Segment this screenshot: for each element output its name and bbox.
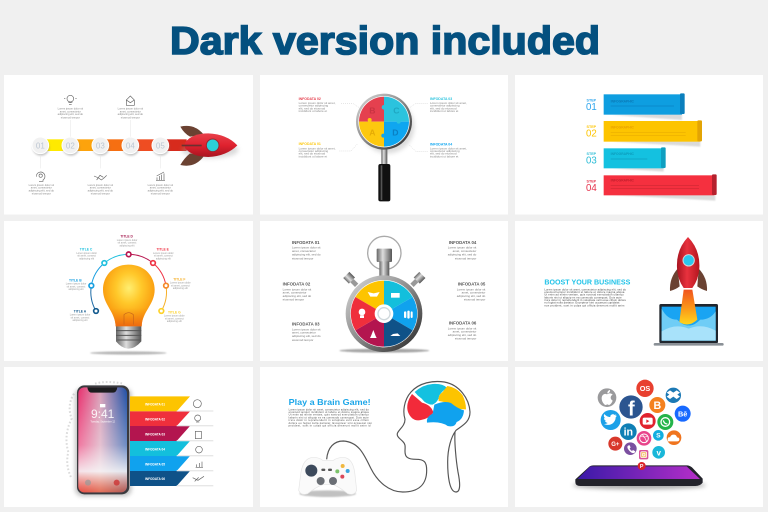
ribbons: INFODATA 02 xyxy=(145,417,165,421)
panel: rocket timeline: adipiscing elit, sed do xyxy=(88,188,114,192)
panel: phone ribbons xyxy=(4,367,253,507)
panel: rocket timeline: eiusmod tempor xyxy=(121,115,140,119)
captions: adipiscing elit xyxy=(79,257,94,260)
social icons: G+ xyxy=(611,442,620,448)
step labels: STEP xyxy=(587,125,597,129)
body text: laboris nisi ut aliquip ex ea commodo consequat. Duis aute xyxy=(544,295,622,299)
panel: rocket timeline: Lorem ipsum dolor sit xyxy=(118,107,143,111)
ribbon 1: INFOGRAPHIC xyxy=(611,99,635,103)
icons and captions xyxy=(36,95,165,181)
icon: magnifying glass: C xyxy=(393,105,400,115)
icon: smartphone xyxy=(573,465,706,489)
body text: Lorem ipsum dolor sit amet, consectetur adipiscing elit, sed do xyxy=(544,287,627,291)
panel: rocket timeline xyxy=(4,75,253,214)
labels: elit, sed do eiusmod xyxy=(299,106,326,110)
labels: INFODATA 03 xyxy=(430,97,452,101)
panel: stopwatch: INFODATA 05 xyxy=(458,281,486,286)
labels: consectetur adipiscing xyxy=(430,149,460,153)
ribbons: INFODATA 05 xyxy=(145,462,165,466)
title: Dark version included xyxy=(170,20,600,63)
icon: rocket xyxy=(670,237,707,291)
captions: eiusmod tempor xyxy=(292,338,313,342)
numbered steps: 02 xyxy=(66,141,75,150)
panel: stopwatch xyxy=(260,221,508,361)
body text xyxy=(544,287,627,307)
panel: stopwatch: amet, consectetur xyxy=(462,291,485,295)
icon: phone: Tuesday, September 12 xyxy=(90,421,116,424)
captions: amet, consectetur xyxy=(283,291,306,295)
social icons: B xyxy=(653,400,661,412)
captions: sit amet, consect xyxy=(165,317,184,320)
captions: INFODATA 01 xyxy=(292,240,320,245)
captions: TITLE D xyxy=(120,235,134,239)
panel: brain game xyxy=(260,367,508,507)
labels: incididunt ut labore et xyxy=(299,109,327,113)
captions: Lorem ipsum dolor sit xyxy=(292,327,321,331)
captions: Lorem ipsum dolor xyxy=(117,239,137,242)
body text: laboris nisi ut aliquip ex ea commodo consequat. Duis aute xyxy=(289,416,369,419)
numbered steps: 01 xyxy=(36,141,45,150)
captions: Lorem ipsum dolor xyxy=(76,252,97,255)
sketch texture behind phone xyxy=(66,382,123,479)
captions: Lorem ipsum dolor xyxy=(66,283,86,286)
social icons: P xyxy=(640,464,644,470)
body text: dolore eu fugiat nulla pariatur. Excepteur sint occaecat non xyxy=(289,422,373,425)
panel: rocket timeline: adipiscing elit, sed do xyxy=(58,112,84,116)
body text: Ut enim ad minim veniam, quis nostrud exercitation ullamco xyxy=(289,414,369,417)
captions: sit amet, consect xyxy=(171,284,190,287)
panel: rocket timeline: amet, consectetur xyxy=(150,186,171,190)
captions: TITLE B xyxy=(69,279,82,283)
icon: magnifying glass: D xyxy=(392,128,398,138)
labels: elit, sed do eiusmod xyxy=(430,152,457,156)
captions: TITLE G xyxy=(168,311,181,315)
numbered steps xyxy=(32,137,169,154)
panel: magnifier puzzle xyxy=(260,75,508,214)
flame xyxy=(679,290,697,325)
step labels: STEP xyxy=(587,98,597,102)
captions: amet, consectetur xyxy=(292,331,316,335)
labels xyxy=(299,97,467,159)
captions: TITLE C xyxy=(80,248,93,252)
ribbon 2: INFOGRAPHIC xyxy=(611,125,635,129)
labels: Lorem ipsum dolor sit amet, xyxy=(299,101,336,105)
step labels: 02 xyxy=(586,129,597,140)
captions: sit amet, consect xyxy=(67,285,86,288)
labels: consectetur adipiscing xyxy=(430,104,460,108)
body text: proident, sunt in culpa qui officia deserunt mollit anim id xyxy=(289,425,371,428)
captions: adipiscing elit, sed do xyxy=(283,294,312,298)
captions: TITLE E xyxy=(156,248,170,252)
leaders xyxy=(339,103,428,152)
head outline and cable xyxy=(327,382,470,492)
body text: eiusmod tempor incididunt ut labore et dolore magna aliqua xyxy=(544,290,625,294)
captions: amet, consectetur xyxy=(292,249,316,253)
panel: stopwatch: adipiscing elit, sed do xyxy=(448,333,477,337)
social icons: S xyxy=(656,433,661,440)
social icons: f xyxy=(628,398,635,420)
captions: adipiscing elit xyxy=(120,244,135,247)
panel: rocket timeline: amet, consectetur xyxy=(31,186,52,190)
captions: Lorem ipsum dolor xyxy=(153,252,174,255)
labels: consectetur adipiscing xyxy=(299,104,329,108)
numbered steps: 03 xyxy=(96,141,105,150)
numbered steps: 05 xyxy=(156,141,165,150)
shadows xyxy=(612,113,715,201)
labels: incididunt ut labore et xyxy=(299,155,327,159)
captions: eiusmod tempor xyxy=(292,256,313,260)
body text: eu fugiat nulla pariatur. Excepteur sint occaecat cupidatat xyxy=(544,301,620,305)
ribbon 4: INFOGRAPHIC xyxy=(611,178,635,182)
panel: stopwatch: INFODATA 04 xyxy=(449,240,477,245)
icon: phone xyxy=(75,385,132,496)
panel: rocket timeline: eiusmod tempor xyxy=(32,192,51,196)
panel: light bulb xyxy=(4,221,253,361)
panel: rocket timeline: amet, consectetur xyxy=(120,109,141,113)
captions: eiusmod tempor xyxy=(283,298,304,302)
social icons: in xyxy=(624,427,633,439)
captions: adipiscing elit xyxy=(69,288,84,291)
panel: rocket timeline: eiusmod tempor xyxy=(91,192,110,196)
captions: adipiscing elit xyxy=(173,287,188,290)
timeline bar xyxy=(40,139,187,151)
panel: stopwatch: adipiscing elit, sed do xyxy=(457,294,486,298)
ribbons: INFODATA 01 xyxy=(145,403,165,407)
body text: eiusmod tempor incididunt ut labore et dolore magna aliqua xyxy=(289,411,369,414)
step labels xyxy=(586,98,597,194)
icon: bulb xyxy=(103,265,155,349)
brain xyxy=(407,384,466,426)
icon: magnifying glass: B xyxy=(369,105,375,115)
step labels: 01 xyxy=(586,102,597,113)
step labels: 03 xyxy=(586,156,597,167)
captions: sit amet, consect xyxy=(71,316,90,319)
ribbons: INFODATA 04 xyxy=(145,447,165,451)
captions: INFODATA 03 xyxy=(292,321,320,326)
icon tabs xyxy=(177,400,213,486)
ribbons: INFODATA 03 xyxy=(145,432,165,436)
ribbons: INFODATA 06 xyxy=(145,477,165,481)
labels: elit, sed do eiusmod xyxy=(430,106,457,110)
labels: incididunt ut labore et xyxy=(430,155,459,159)
body text xyxy=(289,408,373,428)
panel: boost your business xyxy=(515,221,763,361)
captions xyxy=(66,235,191,323)
labels: elit, sed do eiusmod xyxy=(299,152,326,156)
nodes xyxy=(89,252,168,313)
ribbons xyxy=(130,396,190,486)
arc xyxy=(91,254,166,311)
icon: magnifying glass: A xyxy=(369,128,376,138)
step labels: STEP xyxy=(587,179,597,183)
icon: game controller xyxy=(299,458,357,497)
captions: Lorem ipsum dolor sit xyxy=(283,287,311,291)
panel: rocket timeline: eiusmod tempor xyxy=(61,115,80,119)
panel: rocket timeline: Lorem ipsum dolor sit xyxy=(148,183,173,187)
shadow xyxy=(90,351,167,355)
captions: adipiscing elit, sed do xyxy=(292,252,321,256)
body text: non proident, sunt in culpa qui officia deserunt mollit anim xyxy=(544,303,625,307)
body text: Ut enim ad minim veniam, quis nostrud exercitation ullamco xyxy=(544,293,624,297)
captions: adipiscing elit xyxy=(156,257,171,260)
body text: irure dolor in reprehenderit in voluptate velit esse cillum dolore xyxy=(544,298,627,302)
labels: INFODATA 04 xyxy=(430,142,452,146)
captions: adipiscing elit, sed do xyxy=(292,334,321,338)
panel: stopwatch: eiusmod tempor xyxy=(455,256,476,260)
panel: stopwatch: eiusmod tempor xyxy=(464,298,485,302)
panel: rocket timeline: amet, consectetur xyxy=(90,186,111,190)
social icons: OS xyxy=(640,384,650,393)
captions: Lorem ipsum dolor xyxy=(170,282,191,285)
captions: sit amet, consect xyxy=(118,242,137,245)
step labels: STEP xyxy=(587,152,597,156)
captions: adipiscing elit xyxy=(167,320,182,323)
labels: INFODATA 01 xyxy=(299,142,321,146)
panel: social media phone xyxy=(515,367,763,507)
icon: phone: 9:41 xyxy=(91,407,115,421)
body text: irure dolor in reprehenderit in voluptate velit esse cillum xyxy=(289,419,369,422)
labels: incididunt ut labore et xyxy=(430,109,459,113)
captions: sit amet, consect xyxy=(77,255,96,258)
panel: stopwatch: INFODATA 06 xyxy=(449,321,477,326)
step shadows xyxy=(33,139,169,156)
labels: INFODATA 02 xyxy=(299,97,321,101)
panel: stopwatch: adipiscing elit, sed do xyxy=(448,252,477,256)
captions xyxy=(283,240,321,342)
captions: Lorem ipsum dolor sit xyxy=(292,246,321,250)
panel: rocket timeline: eiusmod tempor xyxy=(151,192,170,196)
laptop xyxy=(654,304,724,346)
panel: stopwatch: Lorem ipsum dolor sit xyxy=(448,326,476,330)
labels: Lorem ipsum dolor sit amet, xyxy=(430,101,467,105)
panel: rocket timeline: adipiscing elit, sed do xyxy=(148,188,174,192)
social icons: Bē xyxy=(678,409,687,418)
captions: TITLE A xyxy=(74,309,87,313)
heading: BOOST YOUR BUSINESS xyxy=(544,279,631,286)
panel: rocket timeline: adipiscing elit, sed do xyxy=(118,112,144,116)
panel: stopwatch: Lorem ipsum dolor sit xyxy=(448,246,476,250)
numbered steps: 04 xyxy=(126,141,135,150)
shadow xyxy=(339,349,429,353)
social icons xyxy=(598,380,691,470)
body text: Lorem ipsum dolor sit amet, consectetur adipiscing elit, sed do xyxy=(289,408,369,411)
labels: Lorem ipsum dolor sit amet, xyxy=(430,146,467,150)
ribbon 3: INFOGRAPHIC xyxy=(611,152,635,156)
panel: rocket timeline: adipiscing elit, sed do xyxy=(29,188,55,192)
panel: rocket timeline: Lorem ipsum dolor sit xyxy=(58,107,83,111)
icon: rocket xyxy=(180,126,238,166)
panel: stopwatch: eiusmod tempor xyxy=(455,337,476,341)
captions: Lorem ipsum dolor xyxy=(70,314,90,317)
panel: ribbon steps xyxy=(515,75,763,214)
icon: stopwatch xyxy=(343,236,425,352)
panel: stopwatch: amet, consectetur xyxy=(453,249,476,253)
panel: rocket timeline: Lorem ipsum dolor sit xyxy=(29,183,54,187)
step labels: 04 xyxy=(586,183,597,194)
labels: consectetur adipiscing xyxy=(299,149,329,153)
panel: stopwatch: amet, consectetur xyxy=(453,330,476,334)
heading: Play a Brain Game! xyxy=(289,397,371,407)
captions: adipiscing elit xyxy=(73,319,88,322)
captions: INFODATA 02 xyxy=(283,281,311,286)
panel: rocket timeline: amet, consectetur xyxy=(60,109,81,113)
labels: Lorem ipsum dolor sit amet, xyxy=(299,146,336,150)
social icons: v xyxy=(656,448,661,457)
panel: rocket timeline: Lorem ipsum dolor sit xyxy=(88,183,113,187)
panel: stopwatch: Lorem ipsum dolor sit xyxy=(457,287,485,291)
captions: TITLE F xyxy=(173,277,185,281)
captions: Lorem ipsum dolor xyxy=(164,315,185,318)
captions: sit amet, consect xyxy=(154,255,173,258)
icon: magnifying glass xyxy=(356,94,414,201)
